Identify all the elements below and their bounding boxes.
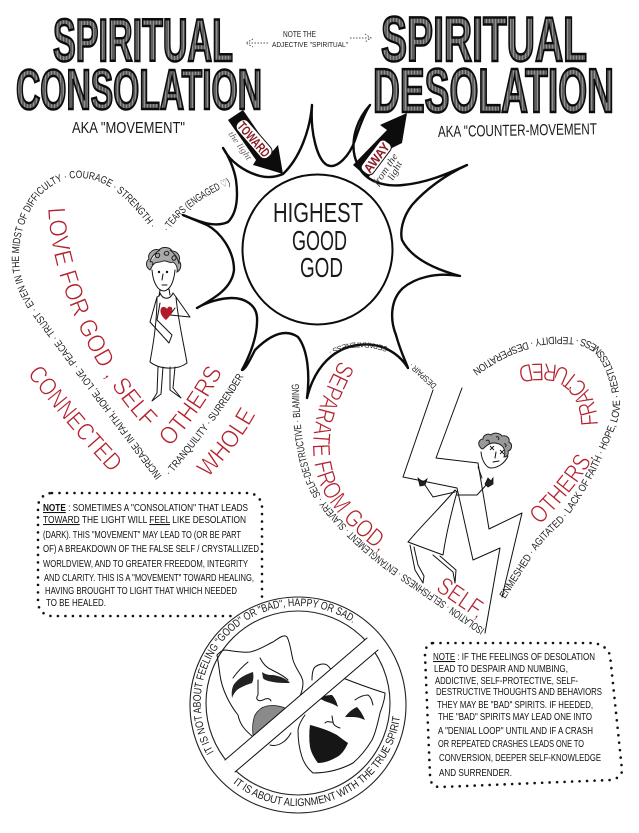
red label: others: OTHERS — [160, 366, 220, 444]
subtitle: aka movement: AKA "MOVEMENT" — [72, 120, 185, 137]
arrow: away from the light — [353, 113, 407, 188]
dress — [150, 293, 187, 368]
note text: ADDICTIVE, SELF-PROTECTIVE, SELF- — [435, 675, 578, 687]
red label: separate from god: SEPARATE FROM GOD, — [313, 362, 383, 554]
dotted border — [425, 643, 622, 787]
note text: (DARK). THIS "MOVEMENT" MAY LEAD TO (OR BE PART — [43, 529, 241, 541]
red label: whole: WHOLE — [196, 407, 256, 474]
title: spiritual desolation — [373, 5, 614, 126]
heart text: separateness: SEPARATENESS · — [330, 342, 388, 353]
title: spiritual consolation: SPIRITUAL — [53, 7, 233, 74]
lightning crack — [403, 388, 522, 633]
note text: AND CLARITY. THIS IS A "MOVEMENT" TOWARD HEALING, — [44, 572, 254, 584]
arrow: toward the light: the light — [226, 129, 254, 162]
note text — [43, 502, 259, 609]
sun label: HIGHEST — [273, 197, 363, 228]
legs — [410, 545, 456, 583]
arms — [425, 483, 488, 497]
sun rays — [183, 105, 467, 398]
note text: NOTE : SOMETIMES A "CONSOLATION" THAT LEADS — [43, 502, 248, 514]
panel: desolation heart — [292, 336, 620, 635]
arrow: away from the light: light — [386, 159, 405, 182]
heart text: left outline: INCREASE IN FAITH, HOPE, LOVE · PEACE · TRUST · EVEN IN THE MIDST OF DIFFICULTY · COURAGE · STRENGTH · — [12, 170, 162, 480]
inner ring — [206, 611, 390, 795]
centre note: adjective spiritual: ADJECTIVE "SPIRITUAL" — [272, 40, 348, 49]
centre note: adjective spiritual: NOTE THE — [283, 30, 316, 39]
note text: NOTE : IF THE FEELINGS OF DESOLATION — [433, 651, 595, 663]
hair — [146, 247, 181, 272]
hair — [479, 433, 512, 457]
sun label — [273, 197, 363, 283]
sun label: GOD — [300, 252, 343, 283]
outer ring — [190, 597, 406, 813]
red label: self: SELF, — [438, 578, 484, 620]
note text — [433, 651, 602, 779]
central circle — [242, 174, 392, 324]
centre note: adjective spiritual — [246, 30, 371, 49]
red label: connected: CONNECTED — [30, 366, 120, 470]
face — [481, 452, 508, 468]
note text: OF) A BREAKDOWN OF THE FALSE SELF / CRYSTALLIZED — [43, 543, 259, 555]
note text: WORLDVIEW, AND TO GREATER FREEDOM, INTEGRITY — [43, 558, 248, 570]
note text: TO BE HEALED. — [46, 597, 106, 609]
note: consolation — [38, 493, 262, 616]
figure: woman with heart — [146, 247, 190, 401]
mask: sad — [217, 636, 303, 745]
legs — [152, 367, 181, 401]
note text: HAVING BROUGHT TO LIGHT THAT WHICH NEEDED — [45, 585, 237, 597]
heart text: right outline: ENMESHED · AGITATED · LACK OF FAITH · HOPE, LOVE · RESTLESSNESS · TEPIDITY · DESPERATION — [473, 336, 620, 598]
heart text: left outline: ISOLATION · SELFISHNESS · ENTANGLEMENT · SLAVERY · SELF-DESTRUCTIVE · BLAMING — [292, 384, 484, 635]
body — [408, 467, 482, 555]
panel: consolation heart — [12, 170, 256, 480]
red label: others: OTHERS. — [530, 454, 594, 522]
arrow: toward the light: TOWARD — [234, 119, 273, 160]
heart text: tears: · TEARS (ENGAGED ♡) — [164, 178, 230, 230]
red label: fractured: FRACTURED — [520, 363, 598, 425]
ring text: top: IT IS NOT ABOUT FEELING "GOOD" OR "BAD", HAPPY OR SAD. — [193, 598, 354, 755]
ring text: bottom: IT IS ABOUT ALIGNMENT WITH THE TRUE SPIRIT — [234, 716, 400, 806]
mask: happy — [298, 664, 385, 773]
sun: highest good god — [183, 105, 467, 398]
dotted border — [38, 493, 262, 616]
note text: AND SURRENDER. — [439, 767, 512, 779]
note text: THE "BAD" SPIRITS MAY LEAD ONE INTO — [438, 711, 592, 723]
heart text: despair: DESPAIR · — [410, 364, 436, 389]
arms — [150, 297, 190, 343]
face — [152, 270, 175, 296]
arrow: away from the light: AWAY — [360, 139, 393, 176]
figure: falling person — [408, 433, 512, 583]
title: spiritual consolation: CONSOLATION — [16, 58, 262, 122]
heart — [160, 307, 172, 320]
arrow: away from the light: from the — [371, 151, 401, 188]
note: desolation — [425, 643, 622, 787]
note text: LEAD TO DESPAIR AND NUMBING, — [434, 663, 568, 675]
heart text: tranquility: · TRANQUILITY · SURRENDER — [168, 374, 244, 474]
sun label: GOOD — [292, 225, 347, 256]
note text: TOWARD THE LIGHT WILL FEEL LIKE DESOLATION — [43, 514, 246, 526]
note text: A "DENIAL LOOP" UNTIL AND IF A CRASH — [438, 725, 593, 737]
panel: no-symbol over masks — [189, 596, 407, 814]
prohibition bar — [225, 638, 378, 772]
title: spiritual consolation — [16, 7, 262, 122]
